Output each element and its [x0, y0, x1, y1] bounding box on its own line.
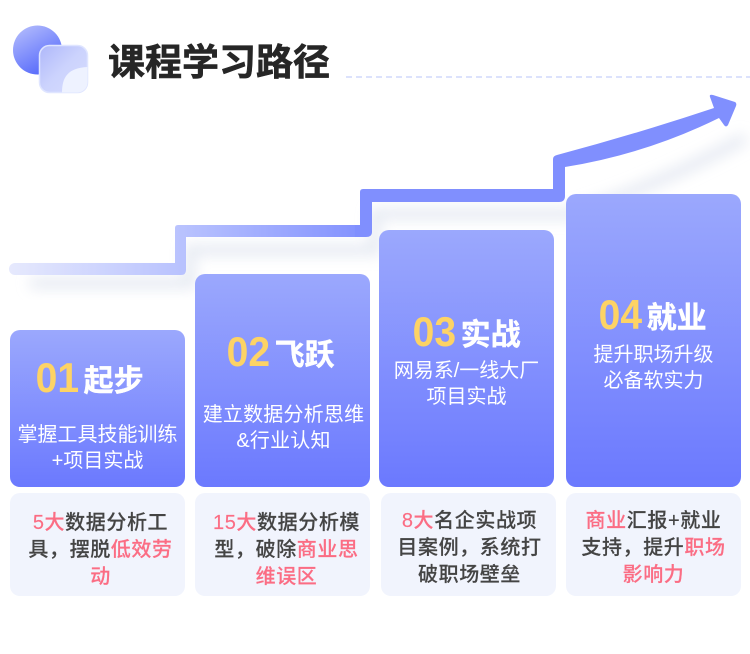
panel: step 03 [379, 230, 554, 487]
icon: header circle and note [13, 26, 88, 94]
callout: step 03: 破职场壁垒 [418, 564, 521, 586]
heading: 03 实战 [413, 308, 521, 355]
heading: 04 就业: 04 [599, 291, 642, 338]
description: step 04: 必备软实力 [604, 370, 704, 392]
callout: step 03: 目案例，系统打 [397, 537, 542, 559]
heading: 03 实战: 实战 [461, 319, 521, 352]
heading: 02 飞跃 [227, 328, 335, 375]
heading: 01 起步 [36, 354, 144, 401]
callout: step 02: 型，破除商业思 [214, 539, 359, 561]
heading: 03 实战: 03 [413, 308, 456, 355]
arrow: rising staircase path [9, 94, 745, 292]
description: step 04: 提升职场升级 [594, 344, 714, 366]
description: step 03: 项目实战 [426, 386, 506, 408]
heading: 04 就业: 就业 [647, 302, 707, 335]
panel: step 04 [566, 194, 741, 487]
description: step 01 [18, 424, 178, 472]
description: step 04 [594, 344, 714, 392]
description: step 03: 网易系/一线大厂 [394, 360, 539, 382]
callout: step 03: 8大名企实战项 [402, 510, 537, 532]
callout: step 04: 影响力 [623, 564, 684, 586]
heading: 01 起步: 01 [36, 354, 79, 401]
callout: step 04 [566, 493, 741, 596]
heading: 02 飞跃: 02 [227, 328, 270, 375]
description: step 02: 建立数据分析思维 [203, 404, 364, 426]
heading: 01 起步: 起步 [84, 365, 144, 398]
panel: step 02 [195, 274, 370, 487]
callout: step 01 [10, 493, 185, 596]
callout: step 03 [381, 493, 556, 596]
heading: 02 飞跃: 飞跃 [275, 339, 335, 372]
title: 课程学习路径 [108, 42, 330, 83]
description: step 02: &行业认知 [236, 430, 331, 452]
callout: step 01: 具，摆脱低效劳 [28, 539, 173, 561]
callout: step 01: 动 [90, 566, 111, 588]
callout: step 02: 15大数据分析模 [213, 512, 360, 534]
description: step 02 [203, 404, 364, 452]
dashed rule [346, 76, 750, 78]
panel: step 01 [10, 330, 185, 487]
callout: step 02 [195, 493, 370, 596]
description: step 03 [394, 360, 539, 408]
callout: step 04: 商业汇报+就业 [586, 510, 721, 532]
heading: 04 就业 [599, 291, 707, 338]
callout: step 01: 5大数据分析工 [33, 512, 168, 534]
callout: step 02: 维误区 [256, 566, 317, 588]
description: step 01: +项目实战 [52, 450, 143, 472]
description: step 01: 掌握工具技能训练 [18, 424, 178, 446]
callout: step 04: 支持，提升职场 [581, 537, 726, 559]
